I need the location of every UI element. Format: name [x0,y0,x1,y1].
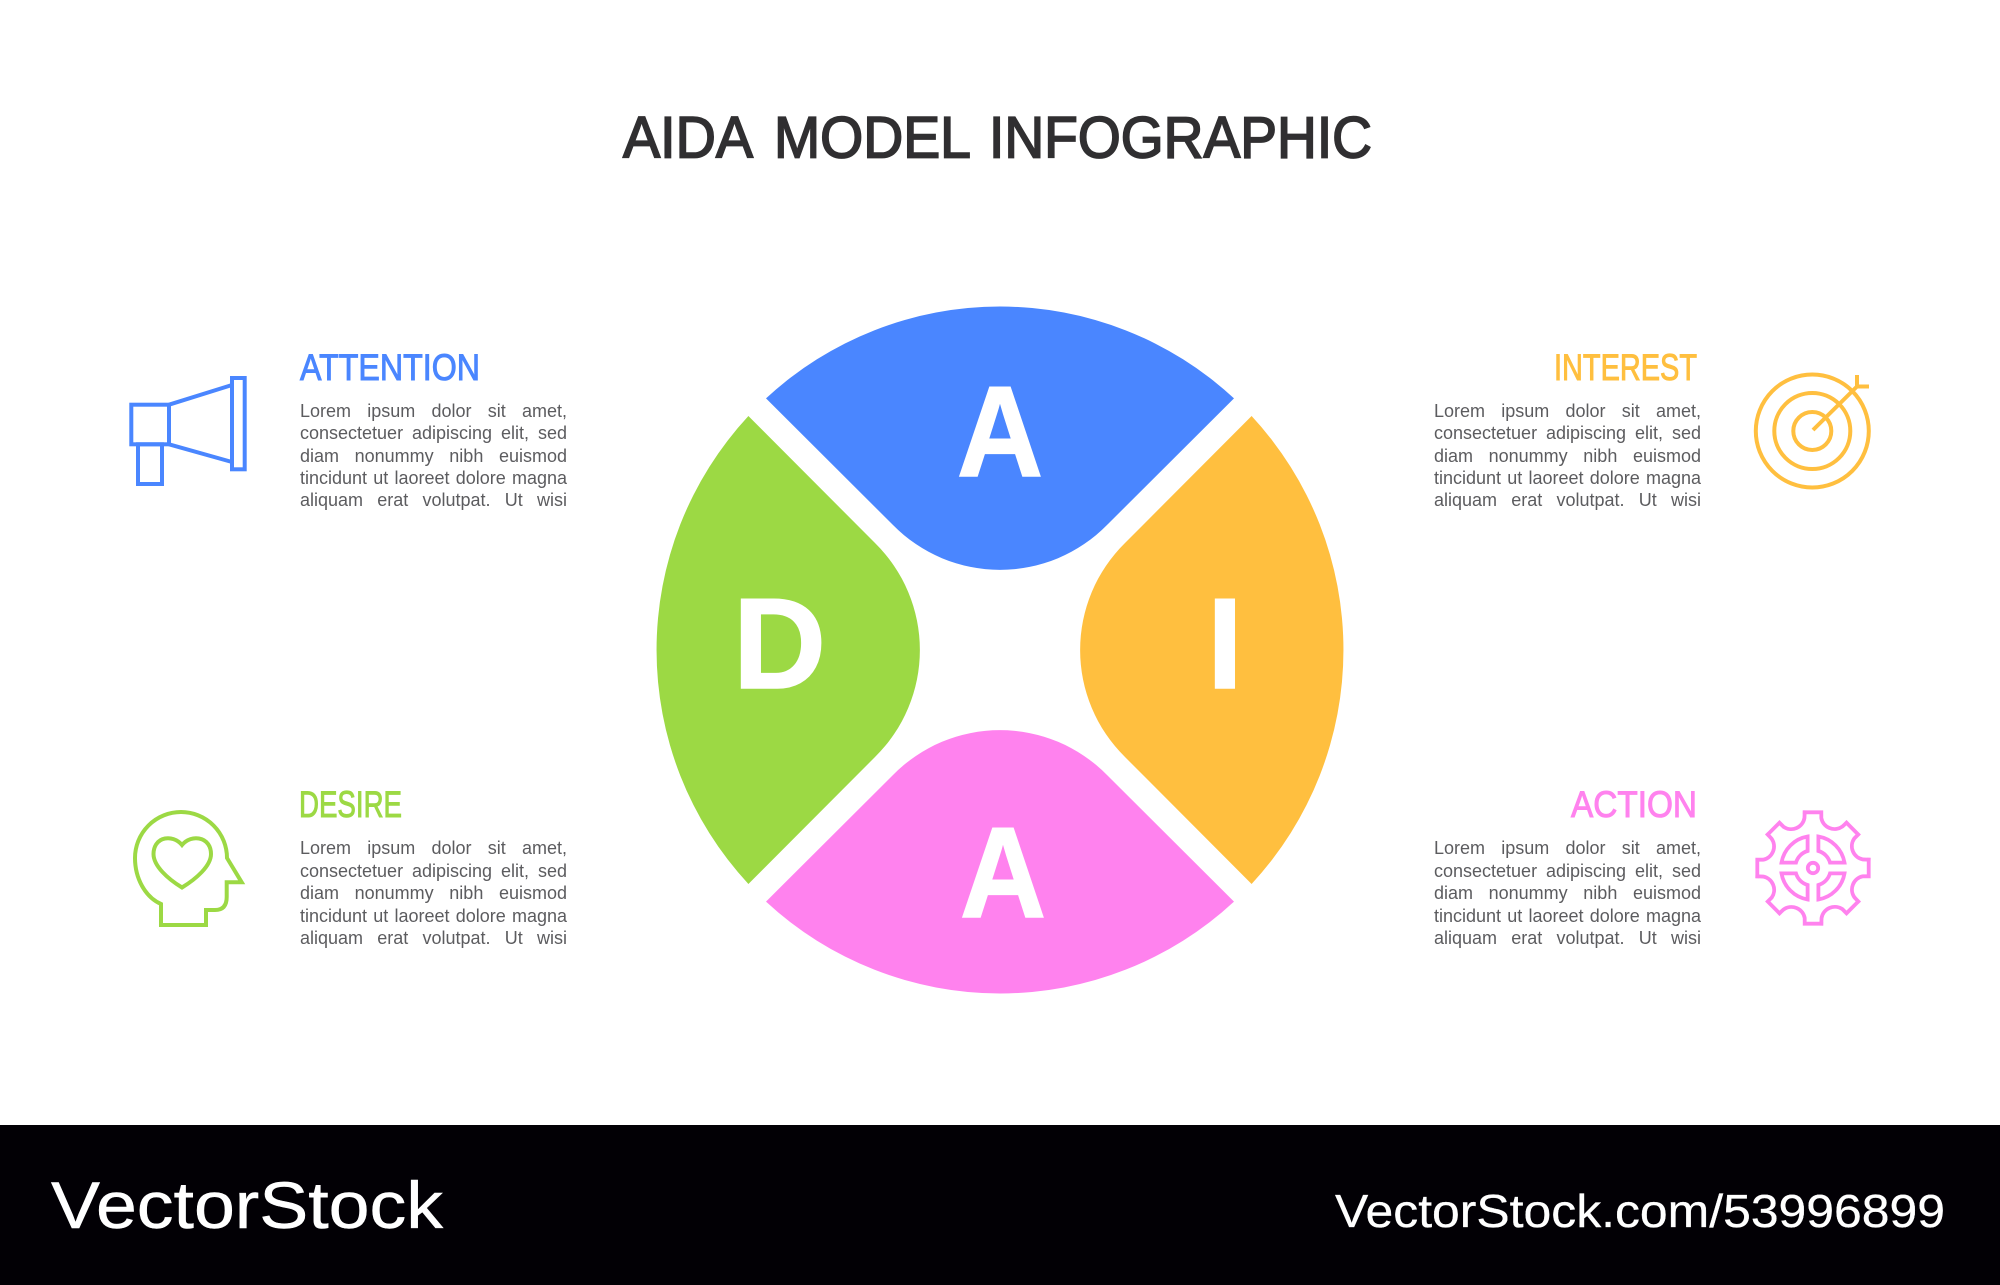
title: INFOGRAPHIC [989,106,1372,170]
text block: desire: aliquam erat volutpat. Ut wisi [300,928,567,948]
text block: interest: Lorem ipsum dolor sit amet, [1434,401,1701,421]
logo wordmark: VectorStock [51,1168,444,1242]
segment: interest I: I [1207,572,1243,716]
panel: desire [133,783,567,948]
text block: interest: consectetuer adipiscing elit, sed [1434,423,1701,443]
text block: attention [300,401,567,510]
icon: target with arrow [1754,372,1871,490]
text block: interest: aliquam erat volutpat. Ut wisi [1434,490,1701,510]
text block: action: consectetuer adipiscing elit, sed [1434,861,1701,881]
image id url: VectorStock.com/53996899 [1335,1185,1945,1237]
text block: action: aliquam erat volutpat. Ut wisi [1434,928,1701,948]
segment: attention A: A [957,360,1043,504]
text block: action: diam nonummy nibh euismod [1434,883,1701,903]
title: MODEL [774,106,971,170]
panel: attention [129,346,567,510]
heading: interest: INTEREST [1554,346,1697,388]
segment: action A: A [960,801,1046,945]
panel: action [1434,783,1871,948]
text block: interest: diam nonummy nibh euismod [1434,446,1701,466]
title [622,106,1372,170]
segment: attention A [766,307,1234,570]
text block: desire: tincidunt ut laoreet dolore magna [300,906,567,926]
text block: action: tincidunt ut laoreet dolore magna [1434,906,1701,926]
text block: attention: diam nonummy nibh euismod [300,446,567,466]
text block: attention: aliquam erat volutpat. Ut wisi [300,490,567,510]
text block: desire: diam nonummy nibh euismod [300,883,567,903]
segment: desire D [657,416,920,884]
text block: attention: Lorem ipsum dolor sit amet, [300,401,567,421]
segment: desire D: D [733,572,826,716]
text block: interest: tincidunt ut laoreet dolore magna [1434,468,1701,488]
heading: action: ACTION [1571,783,1697,825]
icon: gear [1755,810,1871,926]
icon: head with heart [133,810,246,927]
text block: desire: consectetuer adipiscing elit, sed [300,861,567,881]
text block: desire [300,838,567,948]
circular diagram [656,306,1344,994]
text block: desire: Lorem ipsum dolor sit amet, [300,838,567,858]
text block: attention: consectetuer adipiscing elit, sed [300,423,567,443]
title: AIDA [623,106,753,170]
heading: desire: DESIRE [299,783,402,825]
text block: interest [1434,401,1701,510]
segment: action A [766,730,1234,993]
footer banner [0,1125,2000,1285]
segment: interest I [1080,416,1343,884]
panel: interest [1434,346,1871,510]
text block: action: Lorem ipsum dolor sit amet, [1434,838,1701,858]
icon: megaphone [129,376,247,486]
text block: attention: tincidunt ut laoreet dolore magna [300,468,567,488]
text block: action [1434,838,1701,948]
heading: attention: ATTENTION [300,346,480,388]
